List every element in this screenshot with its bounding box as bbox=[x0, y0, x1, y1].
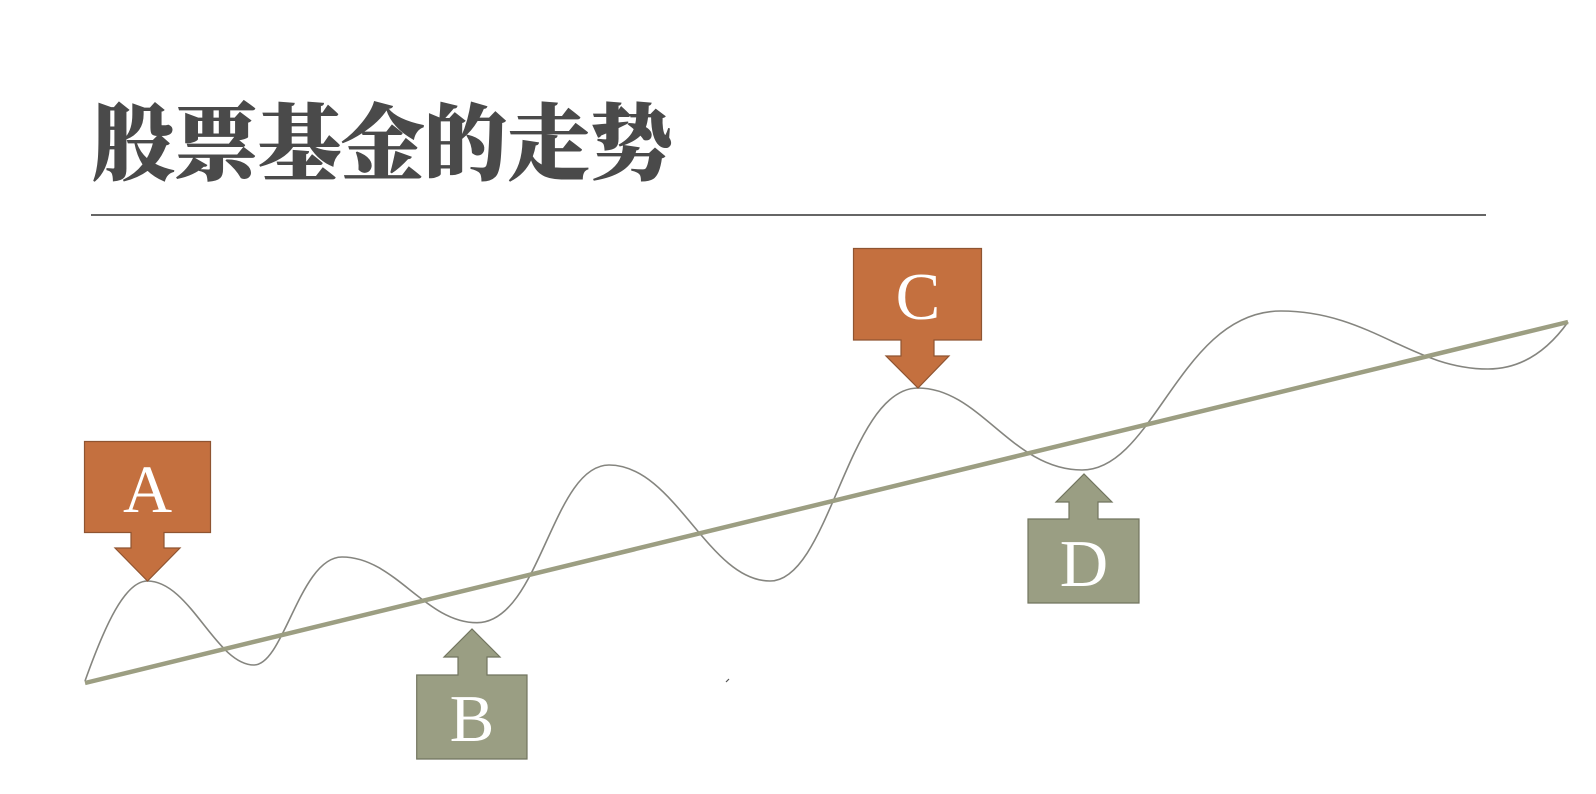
rising trend line bbox=[85, 322, 1568, 683]
callout A: sell arrow at first peak: A bbox=[123, 451, 172, 527]
callout B: buy arrow at trough: B bbox=[450, 682, 494, 756]
callout C: sell arrow at peak: C bbox=[896, 260, 940, 334]
callout C: sell arrow at peak bbox=[854, 248, 982, 388]
callout D: buy arrow at trough bbox=[1028, 474, 1139, 603]
callout D: buy arrow at trough: D bbox=[1060, 527, 1108, 601]
callout A: sell arrow at first peak bbox=[84, 442, 210, 581]
title: 股票基金的走势 bbox=[92, 99, 673, 191]
callout B: buy arrow at trough bbox=[417, 629, 527, 759]
fluctuating price curve bbox=[85, 311, 1568, 681]
